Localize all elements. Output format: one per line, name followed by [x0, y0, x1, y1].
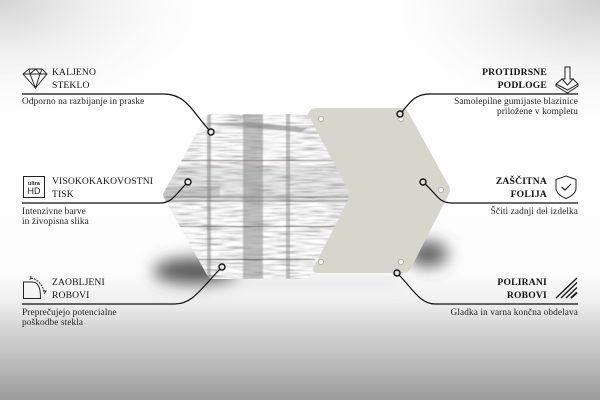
heading: zaobljeni robovi: ZAOBLJENI — [52, 277, 105, 288]
text: protidrsne podloge description: Samolepilne gumijaste blazinice — [454, 97, 578, 107]
heading: kaljeno steklo: KALJENO — [52, 67, 96, 78]
icon: rounded corner — [24, 276, 46, 298]
icon: anti-slip pad with arrow — [556, 67, 578, 93]
mounting holes on back side — [318, 116, 444, 265]
icon: shield with check — [556, 176, 576, 198]
text: kaljeno steklo description: Odporno na razbijanje in praske — [22, 97, 144, 107]
leader line: zaščitna folija — [420, 179, 578, 203]
heading: zaščitna folija — [496, 176, 547, 200]
heading: zaobljeni robovi: ROBOVI — [52, 290, 90, 301]
heading: protidrsne podloge — [482, 67, 547, 91]
icon: diamond — [23, 69, 47, 88]
icon: ultra HD — [24, 176, 44, 198]
leader line: visokokakovostni tisk — [22, 179, 191, 203]
heading: kaljeno steklo: STEKLO — [52, 80, 90, 91]
heading: protidrsne podloge: PODLOGE — [498, 80, 547, 91]
icon: ultra HD: HD — [28, 186, 41, 196]
text: protidrsne podloge description: priložene v kompletu — [497, 107, 578, 117]
heading: protidrsne podloge: PROTIDRSNE — [482, 67, 547, 78]
heading: visokokakovostni tisk: TISK — [52, 189, 74, 200]
heading: visokokakovostni tisk: VISOKOKAKOVOSTNI — [52, 176, 153, 187]
icon: polished edge stripes — [556, 278, 577, 298]
text: polirani robovi description: Gladka in varna končna obdelava — [450, 308, 578, 318]
heading: zaobljeni robovi — [52, 277, 105, 301]
hexagon: wood plank print front — [160, 110, 355, 282]
heading: polirani robovi: POLIRANI — [497, 277, 547, 288]
heading: polirani robovi — [497, 277, 547, 301]
heading: kaljeno steklo — [52, 67, 96, 91]
heading: polirani robovi: ROBOVI — [507, 290, 547, 301]
heading: visokokakovostni tisk — [52, 176, 153, 200]
text: zaobljeni robovi description — [22, 308, 117, 328]
leader line: polirani robovi — [394, 270, 578, 304]
leader line: protidrsne podloge — [397, 94, 578, 117]
text: visokokakovostni tisk description: Intenzivne barve — [22, 207, 86, 217]
text: zaobljeni robovi description: poškodbe stekla — [22, 318, 83, 328]
heading: zaščitna folija: FOLIJA — [511, 189, 547, 200]
leader line: zaobljeni robovi — [22, 264, 225, 304]
text: zaobljeni robovi description: Preprečujejo potencialne — [22, 308, 117, 318]
icon: ultra HD: ultra — [28, 181, 41, 187]
leader line: kaljeno steklo — [22, 94, 214, 135]
text: zaščitna folija description: Ščiti zadnji del izdelka — [491, 207, 578, 217]
text: protidrsne podloge description — [454, 97, 578, 117]
text: visokokakovostni tisk description: in živopisna slika — [22, 217, 89, 227]
shadow: under hexagons — [153, 241, 448, 284]
text: visokokakovostni tisk description — [22, 207, 89, 227]
hexagon: back side beige — [269, 108, 450, 273]
heading: zaščitna folija: ZAŠČITNA — [496, 176, 547, 187]
